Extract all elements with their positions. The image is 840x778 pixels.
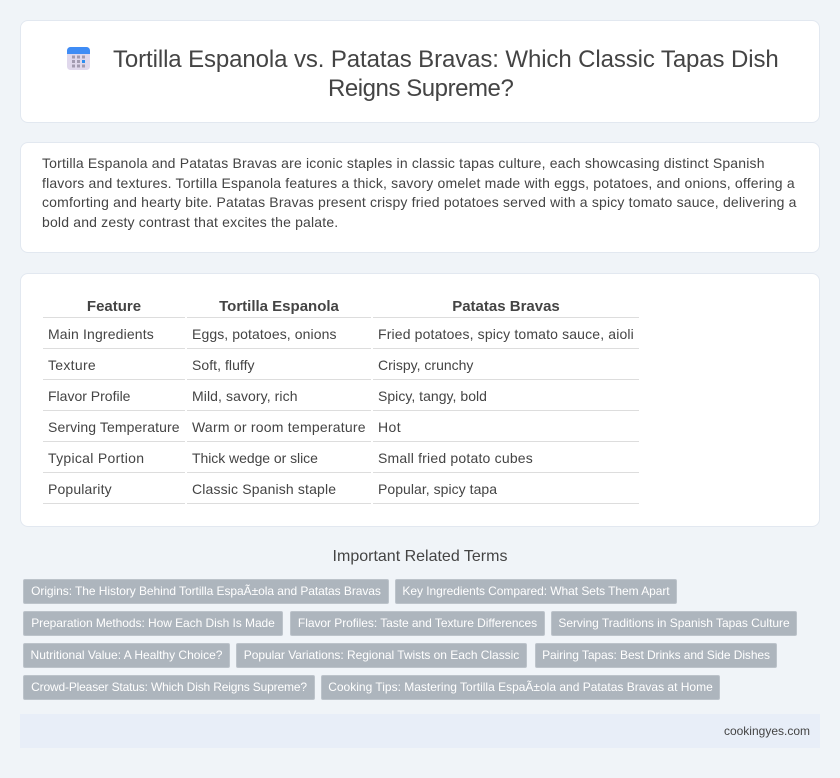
comparison table: Spicy, tangy, bold	[378, 388, 487, 404]
title: Reigns Supreme?	[328, 75, 513, 102]
title: Tortilla Espanola vs. Patatas Bravas: Which Classic Tapas Dish	[113, 46, 779, 73]
intro paragraph	[42, 155, 797, 230]
related terms tags: Origins: The History Behind Tortilla EspaÃ±ola and Patatas Bravas	[31, 584, 381, 598]
comparison table: Typical Portion	[48, 450, 144, 466]
intro paragraph: comforting and hearty bite. Patatas Bravas present crispy fried potatoes served with a spicy tomato sauce, delivering a	[42, 194, 797, 210]
comparison table panel	[20, 273, 820, 527]
title	[113, 46, 779, 102]
comparison table: Mild, savory, rich	[192, 388, 298, 404]
header panel	[20, 20, 820, 123]
related terms tags: Nutritional Value: A Healthy Choice?	[31, 648, 222, 662]
related terms tags: Serving Traditions in Spanish Tapas Culture	[558, 616, 790, 630]
intro paragraph: bold and zesty contrast that excites the palate.	[42, 214, 338, 230]
intro paragraph: flavors and textures. Tortilla Espanola features a thick, savory omelet made with eggs, potatoes, and onions, offering a	[42, 174, 795, 190]
related terms heading: Important Related Terms	[333, 548, 507, 565]
comparison table: Popularity	[48, 481, 112, 497]
related terms tags: Preparation Methods: How Each Dish Is Made	[31, 616, 275, 630]
comparison table: Tortilla Espanola	[219, 298, 339, 315]
icon: calendar	[67, 47, 90, 70]
comparison table: Small fried potato cubes	[378, 450, 533, 466]
source credit: cookingyes.com	[724, 724, 810, 738]
comparison table: Eggs, potatoes, onions	[192, 326, 337, 342]
comparison table: Classic Spanish staple	[192, 481, 336, 497]
related terms tags: Key Ingredients Compared: What Sets Them Apart	[402, 584, 670, 598]
comparison table: Texture	[48, 357, 96, 373]
related terms tags: Cooking Tips: Mastering Tortilla EspaÃ±ola and Patatas Bravas at Home	[328, 680, 713, 694]
comparison table: Patatas Bravas	[452, 298, 560, 315]
comparison table: Warm or room temperature	[192, 419, 366, 435]
comparison table: Hot	[378, 419, 401, 435]
related terms tags: Popular Variations: Regional Twists on Each Classic	[244, 648, 519, 662]
related terms tags: Crowd-Pleaser Status: Which Dish Reigns Supreme?	[31, 680, 307, 694]
comparison table: Feature	[87, 298, 141, 315]
comparison table: Popular, spicy tapa	[378, 481, 497, 497]
intro text panel	[20, 142, 820, 253]
comparison table: Serving Temperature	[48, 419, 180, 435]
comparison table: Flavor Profile	[48, 388, 130, 404]
related terms tags: Pairing Tapas: Best Drinks and Side Dishes	[542, 648, 770, 662]
related terms tags	[23, 579, 797, 700]
footer bar	[20, 714, 820, 748]
comparison table: Crispy, crunchy	[378, 357, 473, 373]
intro paragraph: Tortilla Espanola and Patatas Bravas are iconic staples in classic tapas culture, each showcasing distinct Spanish	[42, 155, 765, 171]
comparison table: Soft, fluffy	[192, 357, 255, 373]
comparison table: Fried potatoes, spicy tomato sauce, aioli	[378, 326, 634, 342]
comparison table: Thick wedge or slice	[192, 450, 318, 466]
comparison table	[43, 298, 639, 504]
comparison table: Main Ingredients	[48, 326, 154, 342]
related terms tags: Flavor Profiles: Taste and Texture Differences	[298, 616, 537, 630]
